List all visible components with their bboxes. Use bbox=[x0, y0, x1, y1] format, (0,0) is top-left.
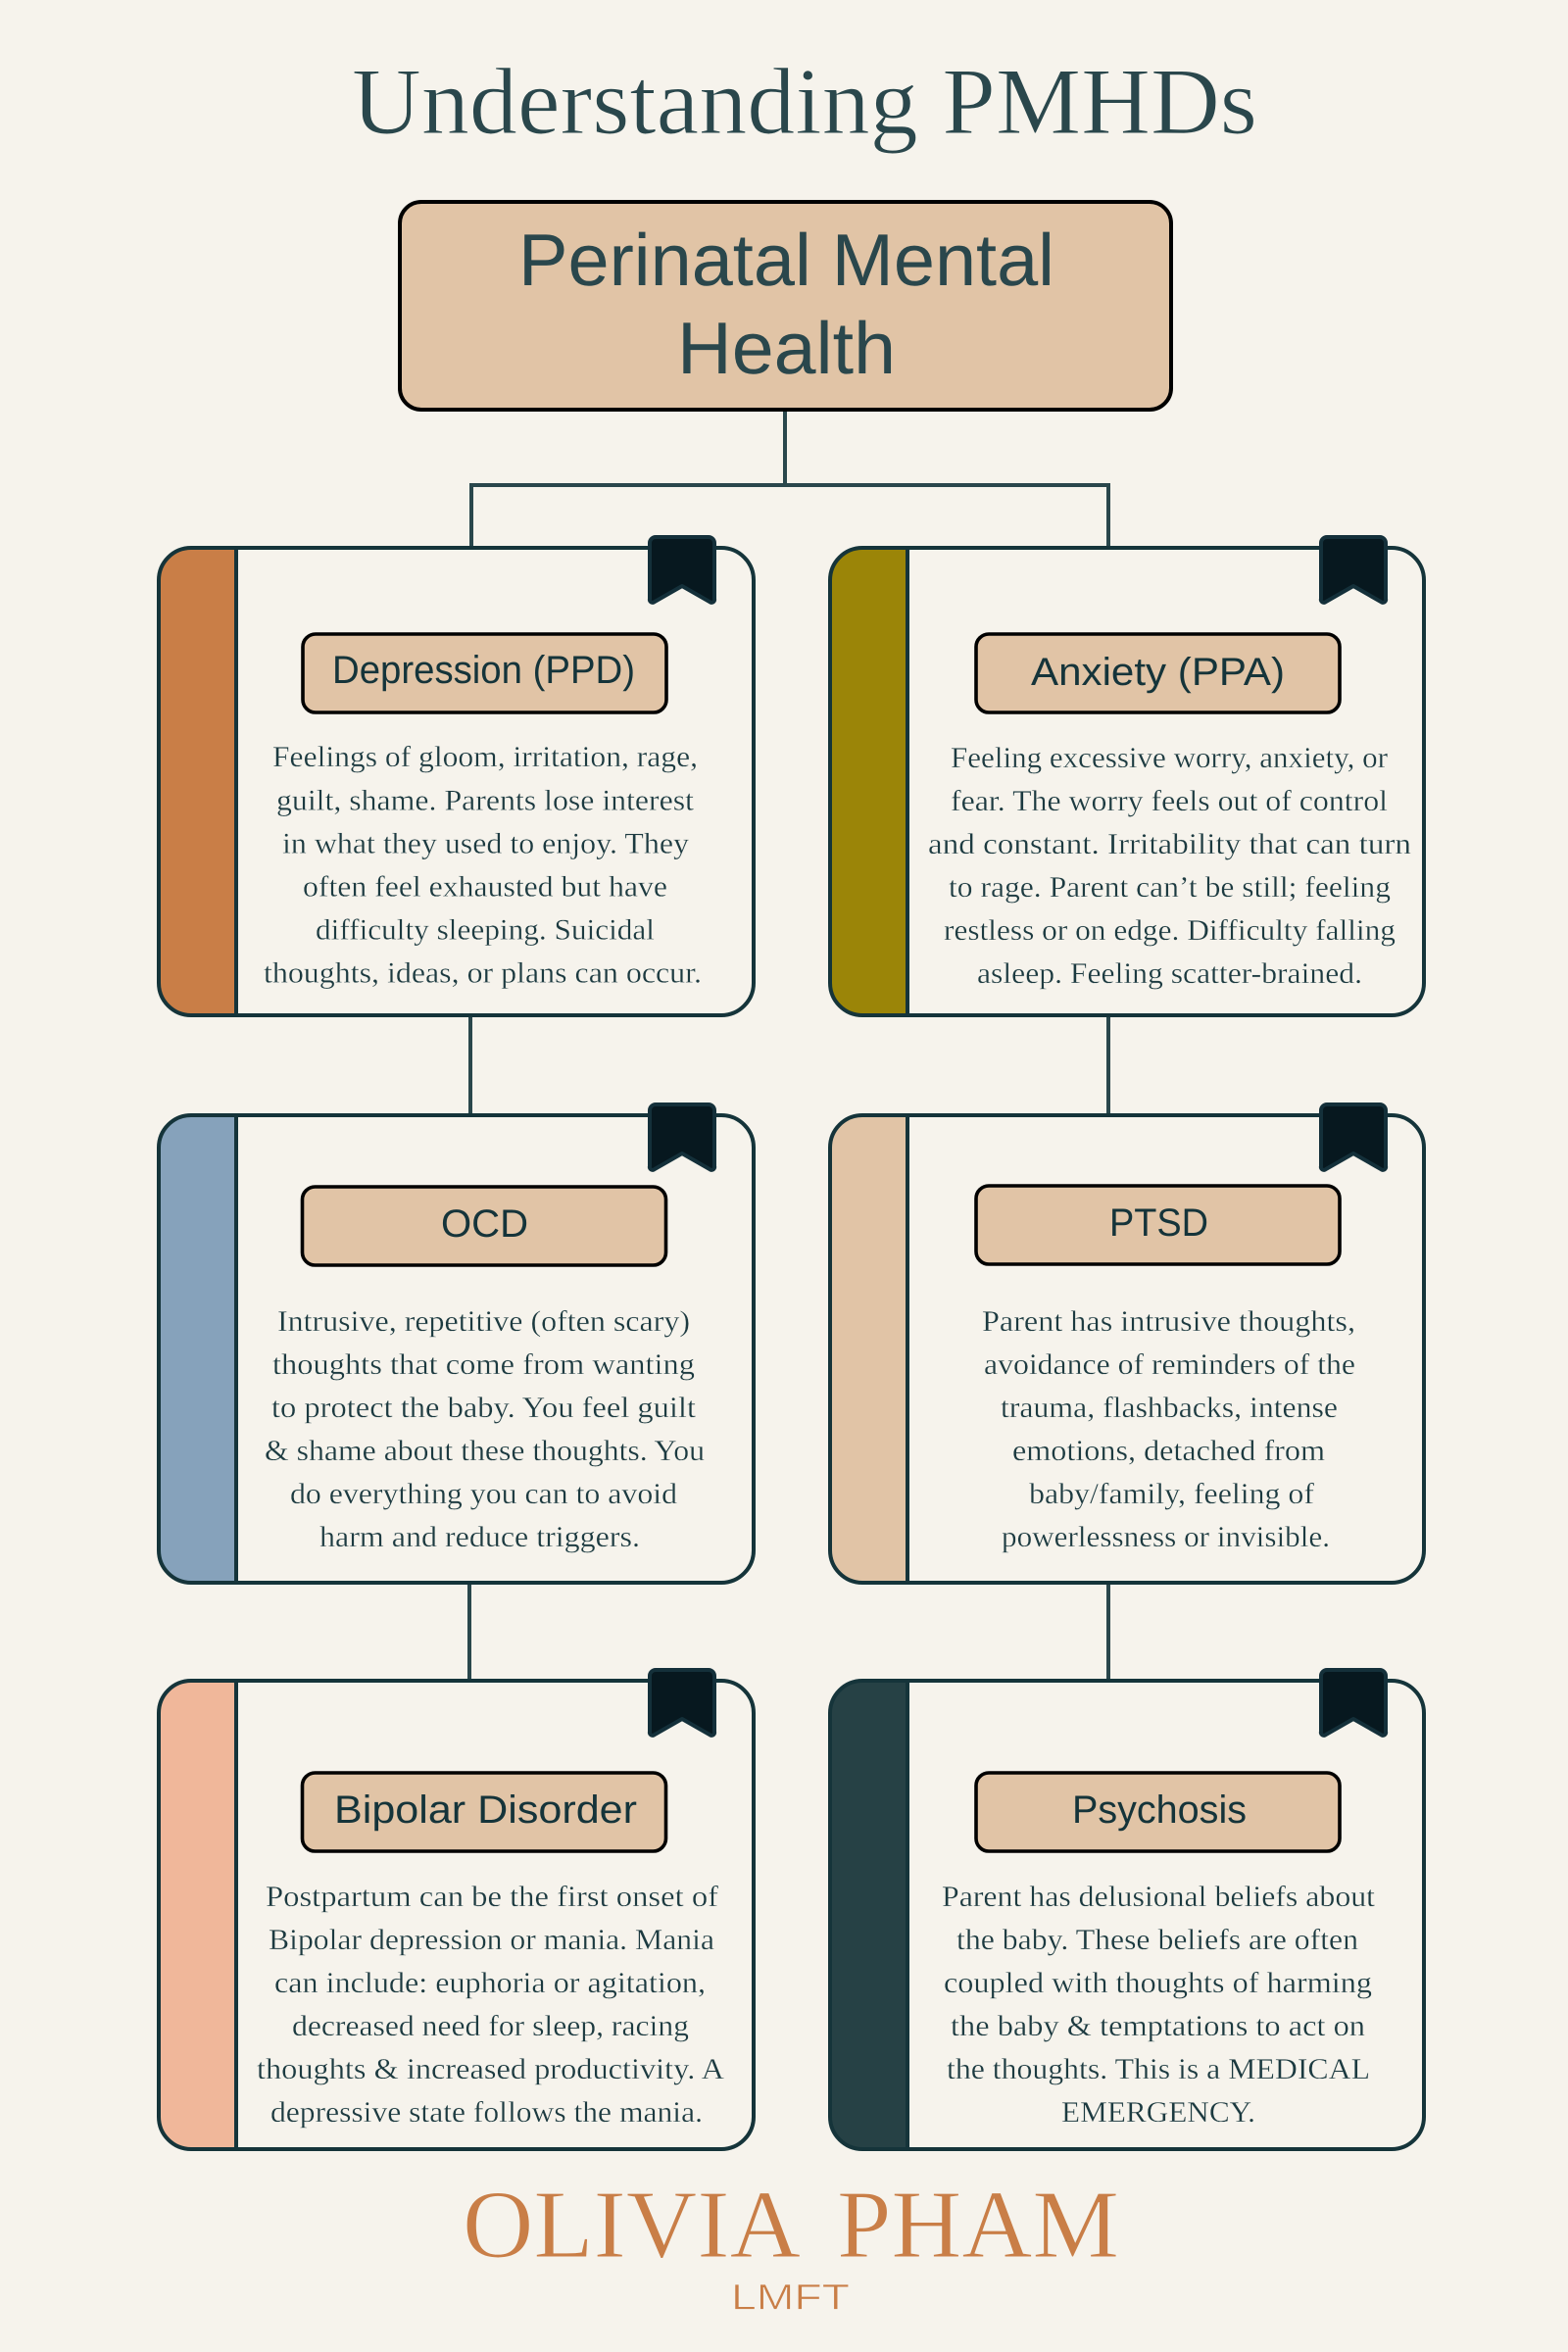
spine: olive bbox=[830, 548, 907, 1015]
heading pill bbox=[976, 1773, 1340, 1851]
text block: to protect the baby. You feel guilt bbox=[271, 1392, 697, 1424]
text block: Feeling excessive worry, anxiety, or bbox=[951, 742, 1388, 774]
text block bbox=[257, 1881, 724, 2129]
panel: Bipolar Disorder bbox=[159, 1670, 754, 2149]
panel: OCD bbox=[159, 1104, 754, 1583]
panel: PTSD bbox=[830, 1104, 1424, 1583]
text block: coupled with thoughts of harming bbox=[944, 1967, 1372, 1999]
text block: decreased need for sleep, racing bbox=[292, 2010, 689, 2042]
panel: Psychosis bbox=[830, 1670, 1424, 2149]
footer name: PHAM bbox=[837, 2172, 1119, 2278]
text block: often feel exhausted but have bbox=[303, 870, 667, 904]
text block: in what they used to enjoy. They bbox=[282, 827, 689, 860]
icon: bookmark bbox=[1321, 537, 1386, 603]
connector line: OCD to bipolar bbox=[467, 1585, 471, 1679]
heading pill bbox=[976, 1186, 1340, 1264]
text block: thoughts & increased productivity. A bbox=[257, 2053, 724, 2085]
heading pill bbox=[303, 634, 666, 712]
connector line: PTSD to psychosis bbox=[1106, 1585, 1110, 1679]
text block: & shame about these thoughts. You bbox=[265, 1435, 705, 1467]
root box: Perinatal Mental Health bbox=[400, 202, 1171, 410]
text block: trauma, flashbacks, intense bbox=[1001, 1392, 1338, 1424]
card outline bbox=[830, 1681, 1424, 2149]
card outline bbox=[159, 1681, 754, 2149]
icon: bookmark bbox=[650, 537, 714, 603]
heading pill: Depression (PPD) bbox=[332, 649, 635, 692]
text block: Parent has delusional beliefs about bbox=[942, 1881, 1376, 1913]
text block: Intrusive, repetitive (often scary) bbox=[277, 1305, 690, 1338]
text block bbox=[265, 1305, 705, 1553]
text block: emotions, detached from bbox=[1012, 1435, 1325, 1467]
text block: restless or on edge. Difficulty falling bbox=[944, 914, 1396, 947]
text block bbox=[928, 742, 1411, 990]
text block: asleep. Feeling scatter-brained. bbox=[977, 957, 1362, 990]
text block: powerlessness or invisible. bbox=[1002, 1521, 1330, 1553]
title: Understanding PMHDs bbox=[352, 49, 1257, 154]
text block: avoidance of reminders of the bbox=[984, 1348, 1355, 1381]
heading pill bbox=[302, 1773, 666, 1851]
footer name bbox=[463, 2172, 1119, 2278]
footer name: OLIVIA bbox=[463, 2172, 801, 2278]
text block: EMERGENCY. bbox=[1061, 2096, 1255, 2129]
text block: Bipolar depression or mania. Mania bbox=[269, 1924, 714, 1956]
text block: do everything you can to avoid bbox=[290, 1478, 677, 1510]
connector line: depression to OCD bbox=[468, 1017, 472, 1113]
card outline bbox=[830, 548, 1424, 1015]
text block: thoughts, ideas, or plans can occur. bbox=[264, 956, 702, 990]
text block: fear. The worry feels out of control bbox=[951, 785, 1388, 817]
text block bbox=[942, 1881, 1376, 2129]
text block: Feelings of gloom, irritation, rage, bbox=[272, 741, 698, 773]
heading pill bbox=[302, 1187, 666, 1265]
card outline bbox=[830, 1115, 1424, 1583]
text block: harm and reduce triggers. bbox=[319, 1521, 640, 1553]
panel: Anxiety (PPA) bbox=[830, 537, 1424, 1015]
footer credential: LMFT bbox=[731, 2278, 850, 2317]
panel: Depression (PPD) bbox=[159, 537, 754, 1015]
icon: bookmark bbox=[1321, 1104, 1386, 1170]
heading pill bbox=[976, 634, 1340, 712]
heading pill: Anxiety (PPA) bbox=[1031, 651, 1285, 694]
card outline bbox=[159, 1115, 754, 1583]
card outline bbox=[159, 548, 754, 1015]
text block: the thoughts. This is a MEDICAL bbox=[947, 2053, 1370, 2085]
connector line: anxiety to PTSD bbox=[1106, 1017, 1110, 1113]
spine: tan bbox=[830, 1115, 907, 1583]
text block: difficulty sleeping. Suicidal bbox=[316, 913, 655, 947]
text block: Parent has intrusive thoughts, bbox=[982, 1305, 1355, 1338]
text block: can include: euphoria or agitation, bbox=[274, 1967, 706, 1999]
text block: Postpartum can be the first onset of bbox=[266, 1881, 718, 1913]
text block: thoughts that come from wanting bbox=[272, 1348, 695, 1381]
heading pill: Psychosis bbox=[1072, 1788, 1247, 1832]
text block: to rage. Parent can’t be still; feeling bbox=[949, 871, 1391, 904]
spine: blue bbox=[159, 1115, 236, 1583]
heading pill: Bipolar Disorder bbox=[334, 1788, 637, 1832]
icon: bookmark bbox=[650, 1670, 714, 1736]
connector lines: top tree bbox=[471, 412, 1108, 547]
spine: orange bbox=[159, 548, 236, 1015]
text block: the baby & temptations to act on bbox=[951, 2010, 1365, 2042]
heading pill: PTSD bbox=[1109, 1201, 1208, 1245]
heading pill: OCD bbox=[441, 1202, 528, 1246]
text block: and constant. Irritability that can turn bbox=[928, 828, 1411, 860]
text block: depressive state follows the mania. bbox=[270, 2096, 703, 2129]
text block: baby/family, feeling of bbox=[1029, 1478, 1314, 1510]
root box: Perinatal Mental Health: Health bbox=[677, 307, 896, 389]
text block: the baby. These beliefs are often bbox=[956, 1924, 1358, 1956]
icon: bookmark bbox=[1321, 1670, 1386, 1736]
icon: bookmark bbox=[650, 1104, 714, 1170]
text block bbox=[264, 741, 702, 990]
root box: Perinatal Mental Health: Perinatal Mental bbox=[518, 219, 1054, 301]
text block: guilt, shame. Parents lose interest bbox=[276, 784, 695, 817]
spine: peach bbox=[159, 1681, 236, 2149]
text block bbox=[982, 1305, 1355, 1553]
spine: dark teal bbox=[830, 1681, 907, 2149]
